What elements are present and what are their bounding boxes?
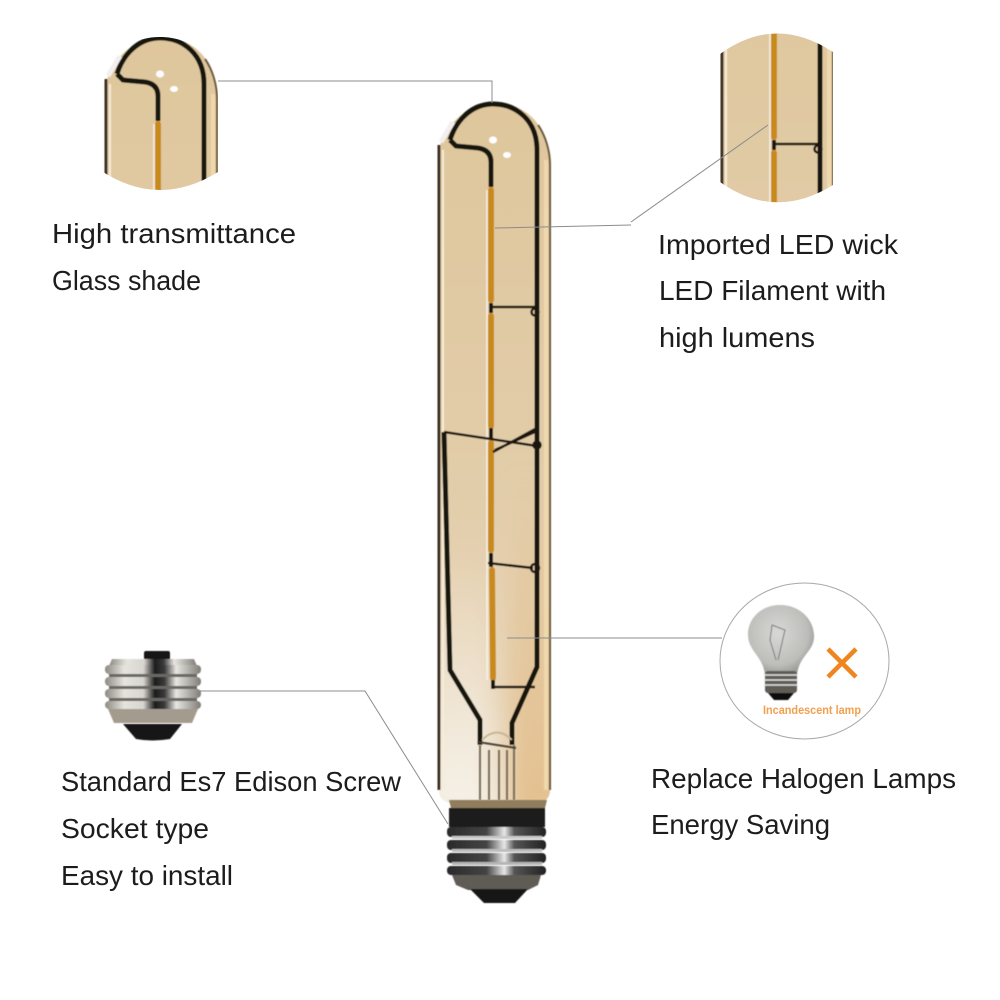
text: LED wick: Imported LED wick	[658, 229, 899, 260]
text: replace halogen: Replace Halogen Lamps	[651, 763, 956, 794]
icon: incandescent bulb	[748, 605, 814, 700]
text: replace halogen: Energy Saving	[651, 809, 830, 840]
text: glass shade: High transmittance	[52, 218, 296, 249]
label: incandescent lamp: Incandescent lamp	[763, 705, 861, 717]
main bulb	[430, 103, 565, 903]
screw base	[447, 800, 547, 903]
text: socket	[61, 766, 402, 891]
icon: screw socket	[105, 651, 201, 740]
text: LED wick: high lumens	[659, 322, 815, 353]
leader lines	[200, 81, 768, 824]
inset: LED wick detail	[720, 34, 833, 202]
text: LED wick	[658, 229, 899, 353]
text: socket: Socket type	[61, 813, 209, 844]
text: glass shade	[52, 218, 296, 296]
glass stem	[478, 732, 516, 800]
text: glass shade: Glass shade	[52, 265, 201, 296]
text: replace halogen	[651, 763, 956, 840]
text: socket: Standard Es7 Edison Screw	[61, 766, 402, 797]
inset: glass shade detail	[104, 37, 218, 190]
callout: incandescent lamp	[720, 583, 889, 739]
icon: orange cross	[828, 649, 856, 677]
text: socket: Easy to install	[61, 860, 233, 891]
text: LED wick: LED Filament with	[659, 275, 886, 306]
